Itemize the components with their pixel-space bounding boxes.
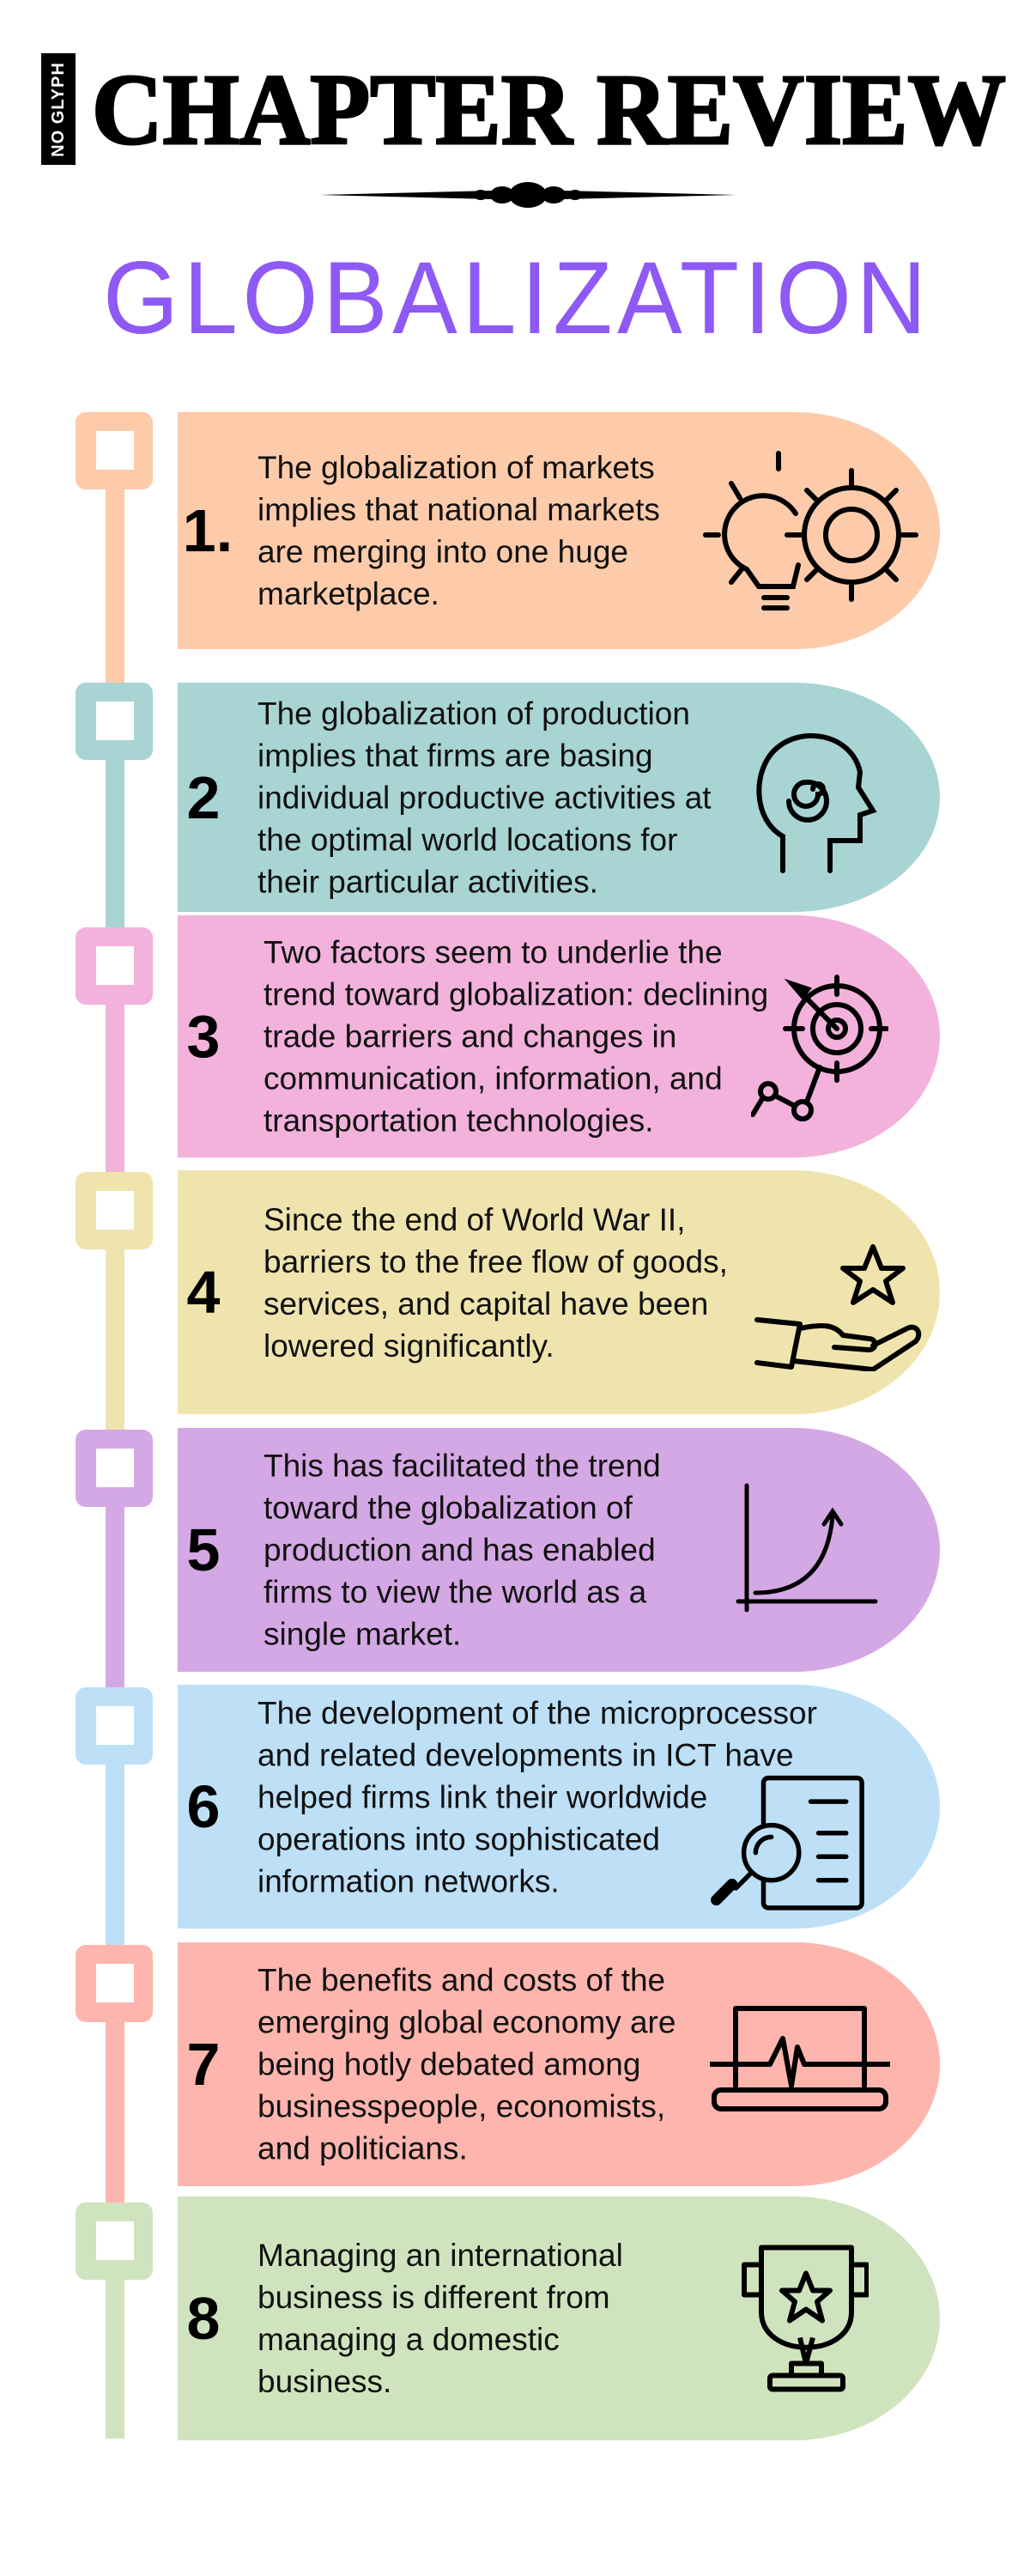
number 8: 8 (187, 2285, 220, 2352)
text 3: trend toward globalization: declining (264, 977, 768, 1012)
panel 4 (178, 1170, 940, 1414)
text 7 (258, 1963, 676, 2166)
panel 6 (178, 1685, 940, 1929)
text 3: trade barriers and changes in (264, 1018, 676, 1054)
text 5: single market. (264, 1616, 461, 1652)
text 7: and politicians. (258, 2131, 468, 2166)
text 4: services, and capital have been (264, 1286, 708, 1321)
badge: NO GLYPH: NO GLYPH (48, 62, 67, 156)
text 1: The globalization of markets (258, 450, 655, 485)
text 2: individual productive activities at (258, 780, 712, 815)
text 8: business is different from (258, 2280, 610, 2315)
panel 7 (178, 1942, 940, 2186)
text 6: and related developments in ICT have (258, 1737, 794, 1772)
badge: NO GLYPH (41, 53, 76, 165)
text 8: managing a domestic (258, 2322, 560, 2357)
text 4: Since the end of World War II, (264, 1202, 685, 1237)
icon: bulb and gear (703, 451, 918, 611)
number 2: 2 (187, 764, 220, 831)
panel 2 (178, 683, 940, 912)
text 2 (258, 696, 712, 899)
text 3: Two factors seem to underlie the (264, 934, 723, 970)
text 4: lowered significantly. (264, 1328, 554, 1364)
text 5: firms to view the world as a (264, 1575, 646, 1609)
text 2: The globalization of production (258, 696, 690, 731)
text 7: being hotly debated among (258, 2047, 640, 2081)
text 3: communication, information, and (264, 1061, 723, 1096)
text 2: their particular activities. (258, 864, 598, 899)
text 1: marketplace. (258, 576, 439, 611)
text 1 (258, 450, 660, 611)
icon: growth graph (736, 1484, 877, 1613)
number 7: 7 (187, 2031, 220, 2098)
icon: laptop with pulse (710, 2006, 890, 2111)
text 7: The benefits and costs of the (258, 1963, 665, 1997)
panel 3 (178, 915, 940, 1157)
icon: target with chart (751, 975, 888, 1121)
text 6: The development of the microprocessor (258, 1695, 817, 1730)
icon: hand with star (754, 1244, 922, 1371)
panel 5 (178, 1428, 940, 1672)
number 3: 3 (187, 1003, 220, 1070)
text 6: helped firms link their worldwide (258, 1779, 707, 1814)
text 5: This has facilitated the trend (264, 1448, 661, 1484)
text 4 (264, 1202, 728, 1364)
text 2: the optimal world locations for (258, 822, 677, 857)
number 5: 5 (187, 1516, 220, 1583)
text 5 (264, 1448, 661, 1652)
timeline (76, 412, 153, 2439)
number 4: 4 (187, 1259, 220, 1326)
text 2: implies that firms are basing (258, 738, 653, 773)
text 8: Managing an international (258, 2238, 623, 2273)
text 5: production and has enabled (264, 1532, 656, 1568)
text 1: implies that national markets (258, 492, 660, 527)
number 6: 6 (187, 1773, 220, 1840)
text 3: transportation technologies. (264, 1103, 654, 1139)
text 3 (264, 934, 768, 1139)
text 1: are merging into one huge (258, 534, 628, 569)
text 7: businesspeople, economists, (258, 2088, 665, 2124)
icon: trophy (742, 2245, 869, 2392)
text 6: operations into sophisticated (258, 1821, 660, 1856)
icon: head with spiral (756, 733, 877, 873)
text 7: emerging global economy are (258, 2004, 676, 2040)
panel 1 (178, 412, 940, 649)
number 1: 1. (183, 497, 233, 564)
text 4: barriers to the free flow of goods, (264, 1244, 728, 1279)
text 6 (258, 1695, 817, 1899)
text 5: toward the globalization of (264, 1491, 633, 1525)
icon: document with magnifier (711, 1776, 864, 1911)
panel 8 (178, 2196, 940, 2440)
text 8: business. (258, 2364, 391, 2399)
text 8 (258, 2238, 623, 2399)
ornament divider (319, 182, 736, 208)
text 6: information networks. (258, 1863, 560, 1899)
